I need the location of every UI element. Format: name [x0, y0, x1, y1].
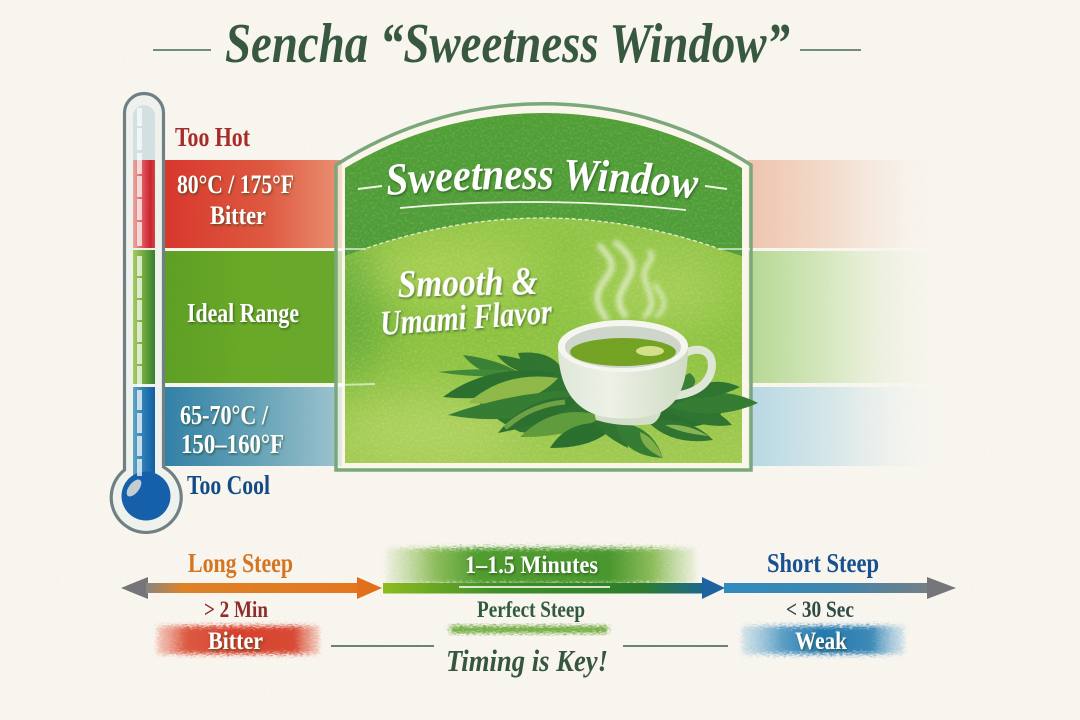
panel header fill: [345, 113, 742, 463]
icon: steam: [597, 243, 664, 318]
label: under 30 sec: < 30 Sec: [786, 597, 854, 622]
band lines through panel: [338, 249, 750, 385]
panel frame: [336, 104, 751, 470]
thermometer glass: [111, 94, 181, 532]
band: too cool: [160, 387, 342, 466]
tea surface: [570, 338, 676, 366]
liquid: green: [133, 250, 155, 384]
footer: timing is key: Timing is Key!: [446, 643, 608, 678]
right grey head: [927, 577, 956, 599]
label: 80C 175F: 80°C / 175°F: [177, 170, 294, 199]
label: over 2 min: > 2 Min: [204, 597, 268, 622]
title: Sencha “Sweetness Window”: [225, 13, 790, 75]
cup foot: [593, 408, 662, 425]
brush: weak: Weak: [795, 628, 847, 655]
panel texture: [345, 110, 742, 463]
tea highlight: [636, 346, 664, 356]
brush: bitter: [157, 626, 319, 655]
scale ticks: [137, 108, 142, 476]
icon: tea cup: [558, 320, 712, 425]
liquid: red: [133, 160, 155, 248]
label: 65-70C: 65-70°C /: [180, 400, 268, 430]
brush: perfect steep: [450, 626, 608, 633]
label: too hot: Too Hot: [175, 122, 250, 152]
cup handle: [674, 350, 712, 396]
white underline: [459, 586, 610, 588]
brush: weak: [742, 626, 904, 655]
label: 150-160F: 150–160°F: [181, 429, 284, 459]
label: bitter: Bitter: [210, 201, 266, 230]
faded band: too cool: [748, 387, 953, 466]
band: too hot: [160, 160, 342, 248]
label: short steep: Short Steep: [767, 548, 879, 578]
green shaft: [383, 583, 705, 594]
bulb highlight: [124, 477, 144, 499]
flavor text: Smooth &: [397, 259, 538, 306]
icon: tea leaves: [438, 352, 758, 458]
thermometer: [111, 94, 181, 532]
label: perfect steep: Perfect Steep: [477, 597, 585, 622]
cup rim: [558, 320, 688, 372]
band: ideal: [160, 251, 342, 383]
blue shaft: [724, 583, 929, 593]
bulb: [122, 472, 170, 520]
cup inside: [565, 326, 681, 368]
temperature bands left: [160, 160, 342, 466]
cup body: [558, 346, 688, 418]
blue head: [702, 577, 725, 599]
header text: Sweetness Window: [388, 160, 700, 200]
panel: sweetness window: [334, 102, 758, 472]
flavor text: Umami Flavor: [379, 292, 553, 343]
panel body fill: [345, 218, 742, 463]
orange head: [357, 577, 382, 599]
label: long steep: Long Steep: [188, 548, 293, 578]
time arrow: [121, 548, 956, 599]
liquid: blue: [133, 387, 155, 479]
label: too cool: Too Cool: [187, 470, 270, 500]
faded band: ideal: [748, 251, 953, 383]
flavor text: [379, 259, 553, 343]
faded band: too hot: [748, 160, 953, 248]
dashed arc: [367, 218, 717, 248]
label: ideal range: Ideal Range: [187, 298, 299, 328]
orange shaft: [146, 583, 360, 593]
left grey head: [121, 577, 148, 599]
green brush: [386, 548, 696, 584]
label: 1-1.5 minutes: 1–1.5 Minutes: [465, 552, 598, 579]
brush: bitter: Bitter: [208, 628, 263, 655]
temperature bands right: [748, 160, 953, 466]
empty upper tube: [133, 105, 155, 160]
